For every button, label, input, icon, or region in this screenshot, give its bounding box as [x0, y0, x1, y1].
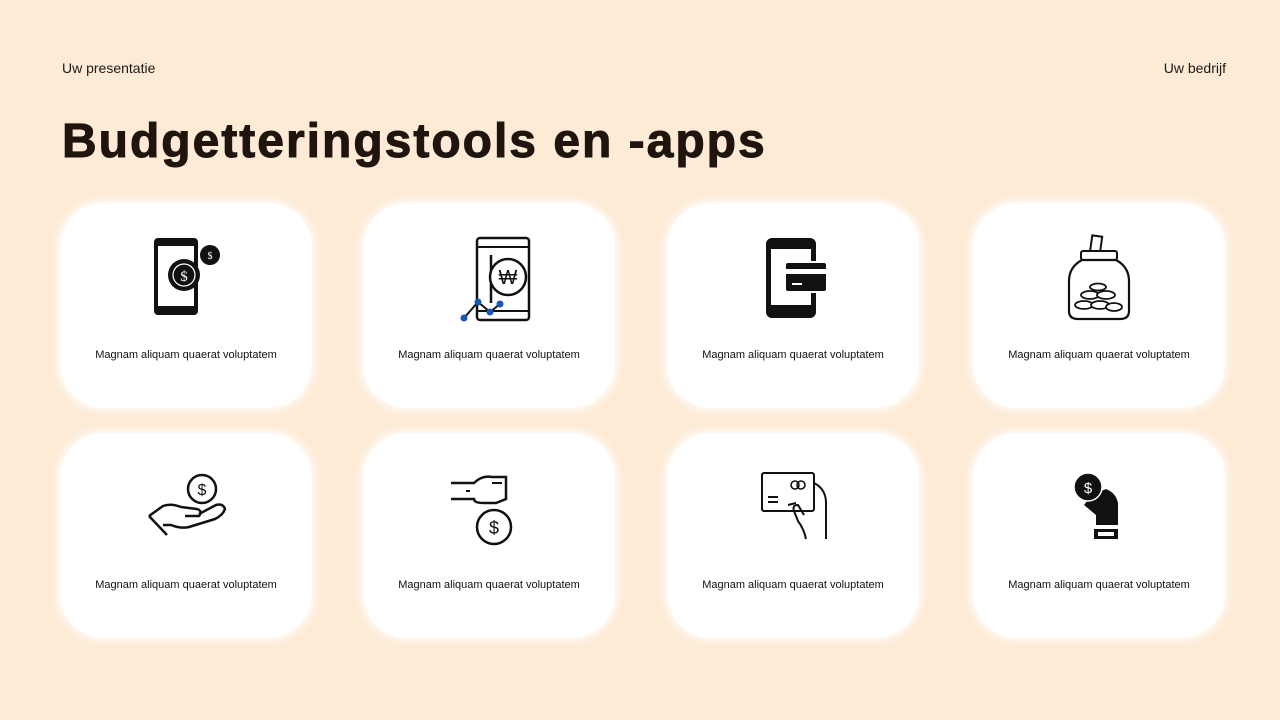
caption: Magnam aliquam quaerat voluptatem — [1008, 579, 1190, 591]
caption: Magnam aliquam quaerat voluptatem — [702, 579, 884, 591]
icon: hand coin — [148, 474, 226, 536]
title: Budgetteringstools en -apps — [62, 115, 767, 168]
card 1: phone with coins — [60, 203, 312, 408]
icon: money bag: $ — [489, 518, 499, 538]
icon: money bag — [451, 475, 512, 546]
icon: tablet won: ₩ — [499, 267, 518, 289]
header right: Uw bedrijf — [1164, 60, 1226, 76]
card 8: hand inserting coin — [973, 433, 1225, 638]
caption: Magnam aliquam quaerat voluptatem — [398, 579, 580, 591]
icon: phone coins — [154, 238, 220, 315]
icon: hand coin black: $ — [1084, 480, 1093, 497]
icon: hand coin black — [1074, 474, 1118, 539]
header left: Uw presentatie — [62, 60, 155, 76]
icon: hand coin: $ — [198, 482, 207, 499]
icon: tablet won — [460, 236, 530, 322]
icon: phone card — [766, 238, 826, 318]
card 6: hand holding money bag — [363, 433, 615, 638]
card 7: hand holding credit card — [667, 433, 919, 638]
caption: Magnam aliquam quaerat voluptatem — [1008, 349, 1190, 361]
caption: Magnam aliquam quaerat voluptatem — [95, 579, 277, 591]
caption: Magnam aliquam quaerat voluptatem — [702, 349, 884, 361]
icon: phone coins: $ — [208, 251, 212, 262]
card 2: tablet won chart — [363, 203, 615, 408]
icon: phone coins: $ — [180, 269, 188, 285]
caption: Magnam aliquam quaerat voluptatem — [398, 349, 580, 361]
icon: credit card hand — [761, 472, 827, 540]
icon: jar — [1068, 234, 1130, 320]
card 3: phone with card — [667, 203, 919, 408]
card 5: hand with coin — [60, 433, 312, 638]
card 4: coin jar — [973, 203, 1225, 408]
caption: Magnam aliquam quaerat voluptatem — [95, 349, 277, 361]
